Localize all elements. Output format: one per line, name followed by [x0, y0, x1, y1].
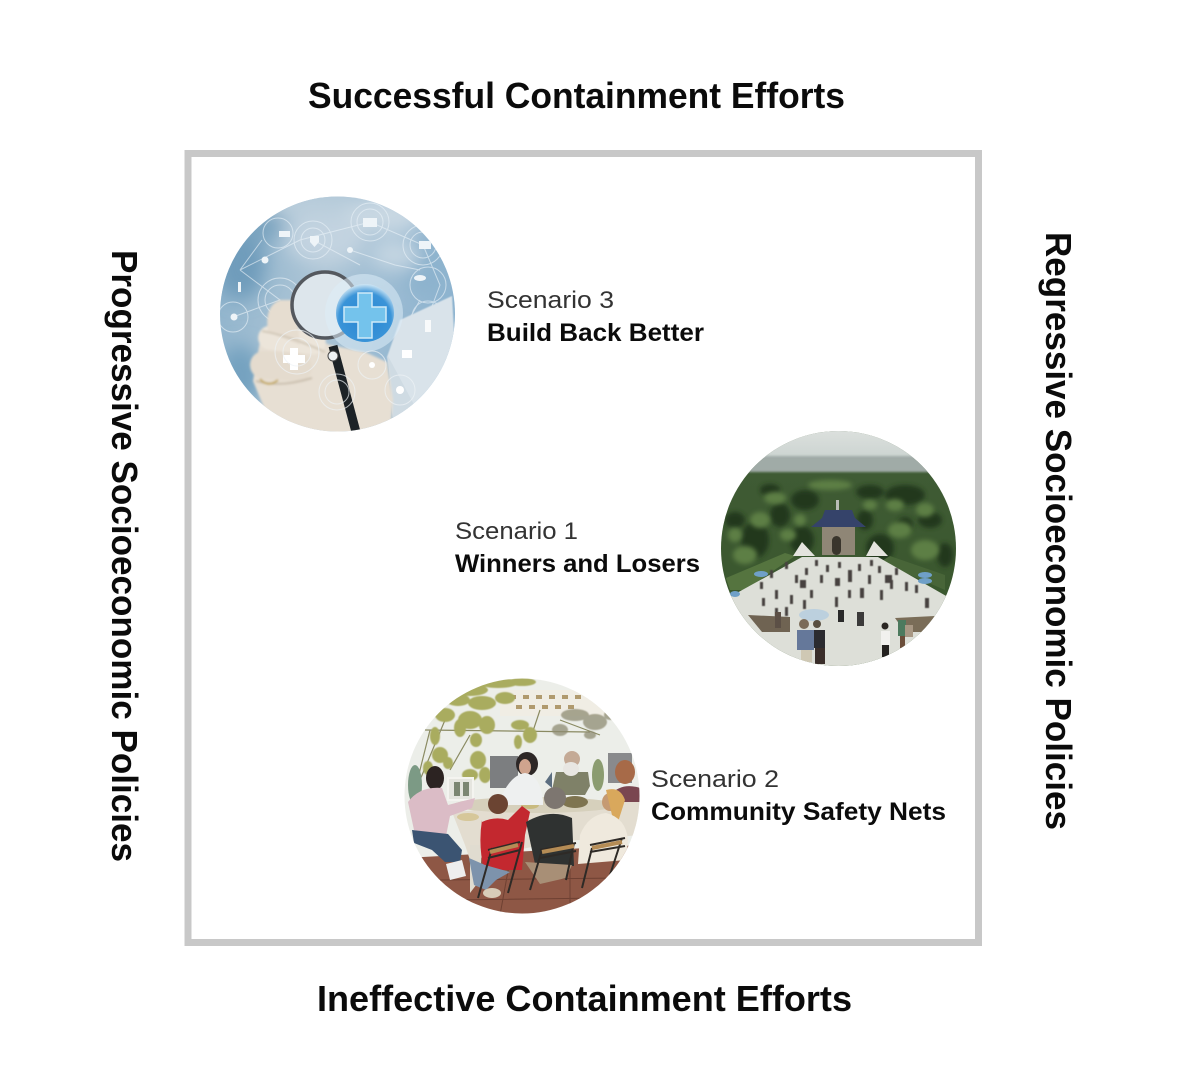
white chair [448, 778, 473, 800]
globe with cross [325, 274, 403, 352]
background chairs [490, 756, 518, 788]
network rings [220, 202, 446, 332]
floor [422, 846, 628, 914]
terrace wall [748, 615, 790, 632]
glove hand [249, 300, 393, 440]
foreground people [775, 610, 913, 664]
person: woman right [615, 760, 640, 802]
person: blonde woman [578, 789, 628, 864]
label: scenario 2: Scenario 2 [651, 766, 779, 793]
label: scenario 1: Winners and Losers [455, 550, 700, 578]
person: woman at back [506, 752, 543, 805]
heading: bottom axis: Ineffective Containment Efforts [317, 978, 852, 1019]
umbrellas [754, 571, 768, 577]
label: scenario 3: Scenario 3 [487, 287, 614, 314]
vine stems [420, 710, 600, 778]
label: scenario 2 [651, 766, 946, 826]
heading: right axis: Regressive Socioeconomic Policies [1038, 232, 1079, 830]
image: outdoor family dinner circle [400, 674, 645, 920]
label: scenario 1: Scenario 1 [455, 518, 578, 545]
chairs [478, 838, 625, 898]
quadrant frame [188, 154, 978, 942]
label: scenario 1 [455, 518, 700, 578]
forest texture [725, 484, 953, 567]
crowd [760, 560, 929, 617]
person: red sweater [469, 794, 530, 898]
stethoscope tube [333, 346, 356, 432]
label: scenario 2: Community Safety Nets [651, 798, 946, 826]
label: scenario 3 [487, 287, 704, 347]
coat [386, 296, 454, 410]
person: bearded man [545, 751, 590, 795]
heading: left axis: Progressive Socioeconomic Policies [104, 250, 145, 862]
stethoscope head [292, 272, 358, 338]
lattice [510, 695, 581, 709]
image: monument plaza circle [721, 431, 956, 666]
person: pink sweater woman [408, 766, 475, 880]
person: black shirt man [525, 787, 574, 884]
image: medical stethoscope circle [220, 196, 455, 432]
plaza [731, 557, 946, 666]
white plus [283, 348, 305, 370]
monument [822, 526, 855, 555]
hedge [726, 553, 795, 590]
table [452, 798, 640, 860]
leaves [423, 678, 537, 783]
heading: top axis: Successful Containment Efforts [308, 75, 845, 116]
label: scenario 3: Build Back Better [487, 319, 704, 347]
